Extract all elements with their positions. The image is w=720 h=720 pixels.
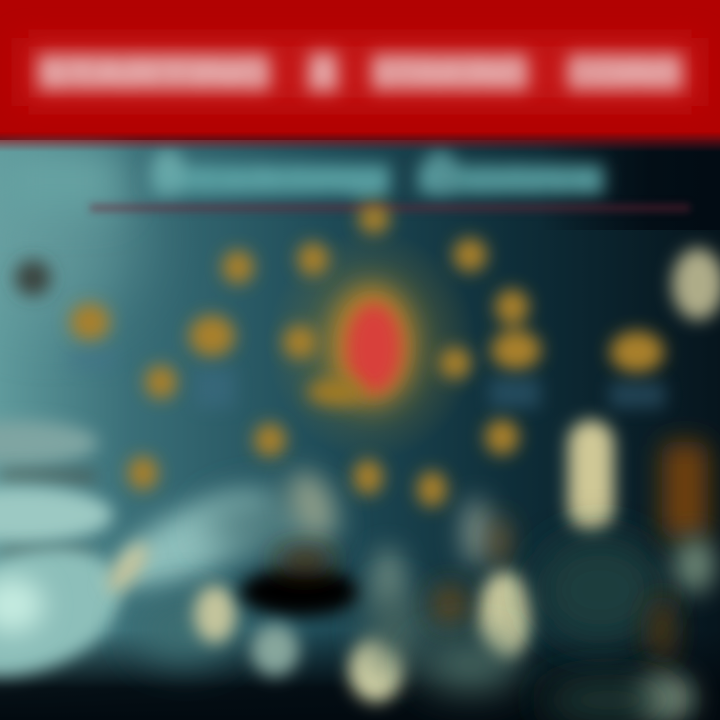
- large capsule: [101, 465, 343, 606]
- icon: pale sphere: [672, 248, 720, 320]
- bottle right: [535, 420, 715, 720]
- stacked tablets left: [0, 421, 139, 699]
- lower pills: [135, 498, 532, 702]
- icon: dark node: [15, 260, 51, 296]
- chart: central network diagram: [15, 204, 720, 507]
- title: A: [306, 50, 340, 97]
- node labels: [70, 350, 665, 408]
- icon: central red hub: [307, 285, 414, 406]
- title: COINS: [566, 50, 684, 97]
- title: STAKING: [370, 50, 530, 97]
- panel: red title banner: [0, 0, 720, 152]
- subtitle: Coins: [418, 159, 604, 200]
- title: [36, 50, 684, 97]
- title: STARTING: [36, 50, 272, 97]
- network nodes: [70, 204, 664, 507]
- subtitle: Staking: [150, 159, 388, 200]
- panel: subtitle band: [0, 149, 690, 212]
- decorative red line: [90, 204, 690, 212]
- panel: foreground pills and bottles: [0, 420, 715, 720]
- subtitle: [150, 149, 604, 200]
- central glow: [267, 230, 477, 460]
